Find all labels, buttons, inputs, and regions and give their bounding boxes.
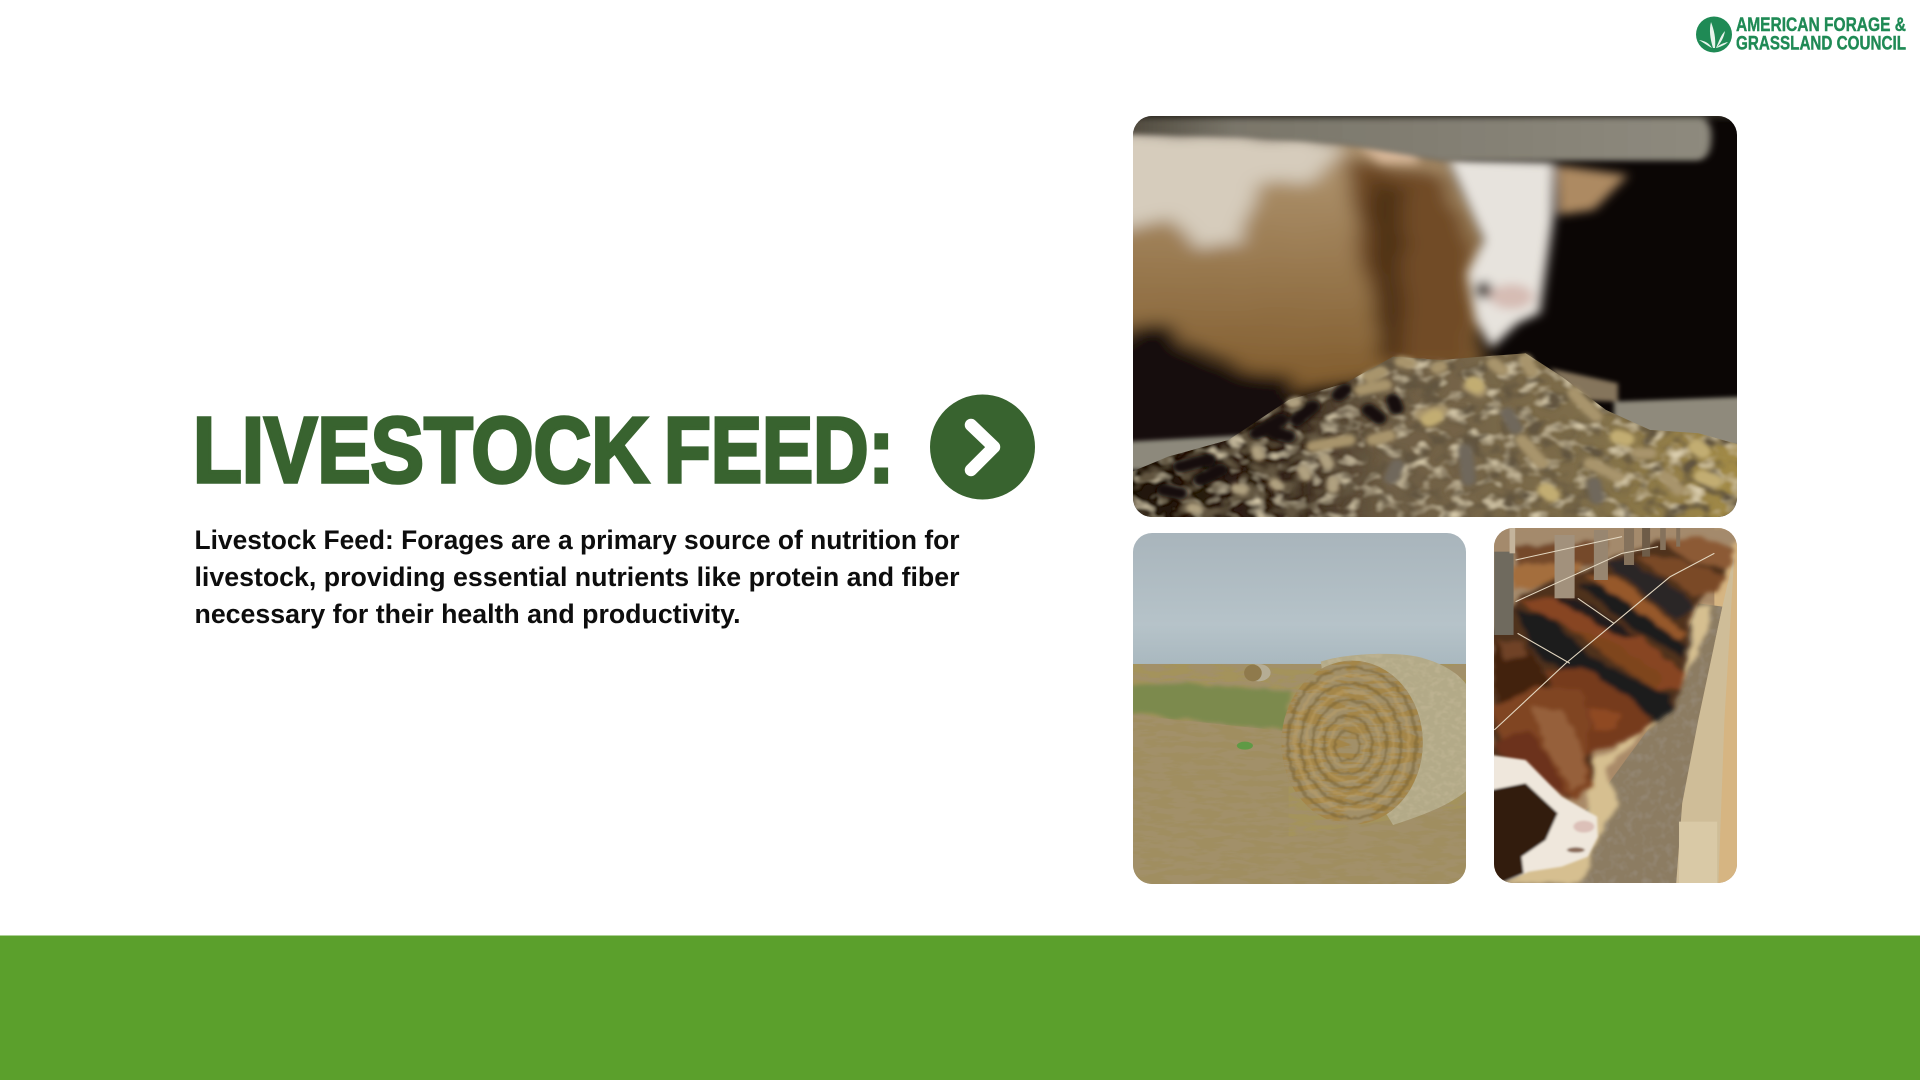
title: LIVESTOCK: [193, 398, 649, 502]
field: [1128, 664, 1469, 887]
body text: Livestock Feed: Forages are a primary source of nutrition for: [194, 525, 960, 555]
body text: [194, 525, 960, 629]
logo text: [1736, 14, 1906, 54]
photo: cow with feed pellets: [1104, 110, 1746, 520]
cow body: [1104, 127, 1489, 447]
ledge: [1128, 368, 1746, 470]
fence: [1494, 527, 1714, 730]
photo: cattle feeding at trough: [1491, 527, 1742, 887]
background pens: [1494, 528, 1736, 590]
photo: round hay bale in field: [1128, 530, 1471, 887]
foreground cow: [1491, 755, 1598, 887]
cow head: [1357, 145, 1628, 348]
steel bar: [1116, 110, 1746, 161]
large hay bale: [1281, 654, 1471, 825]
feed pile: [1128, 353, 1746, 520]
cattle row: [1491, 537, 1734, 800]
trough and ground: [1498, 527, 1742, 887]
logo: American Forage & Grassland Council: [1696, 14, 1906, 54]
sky: [1128, 530, 1469, 665]
body text: necessary for their health and productivity.: [194, 599, 740, 629]
body text: livestock, providing essential nutrients like protein and fiber: [194, 562, 960, 592]
title: FEED:: [664, 398, 894, 502]
distant bale: [1244, 664, 1271, 681]
icon: arrow circle: [930, 394, 1035, 500]
icon: leaf emblem: [1696, 16, 1732, 52]
footer band: [0, 936, 1920, 1080]
